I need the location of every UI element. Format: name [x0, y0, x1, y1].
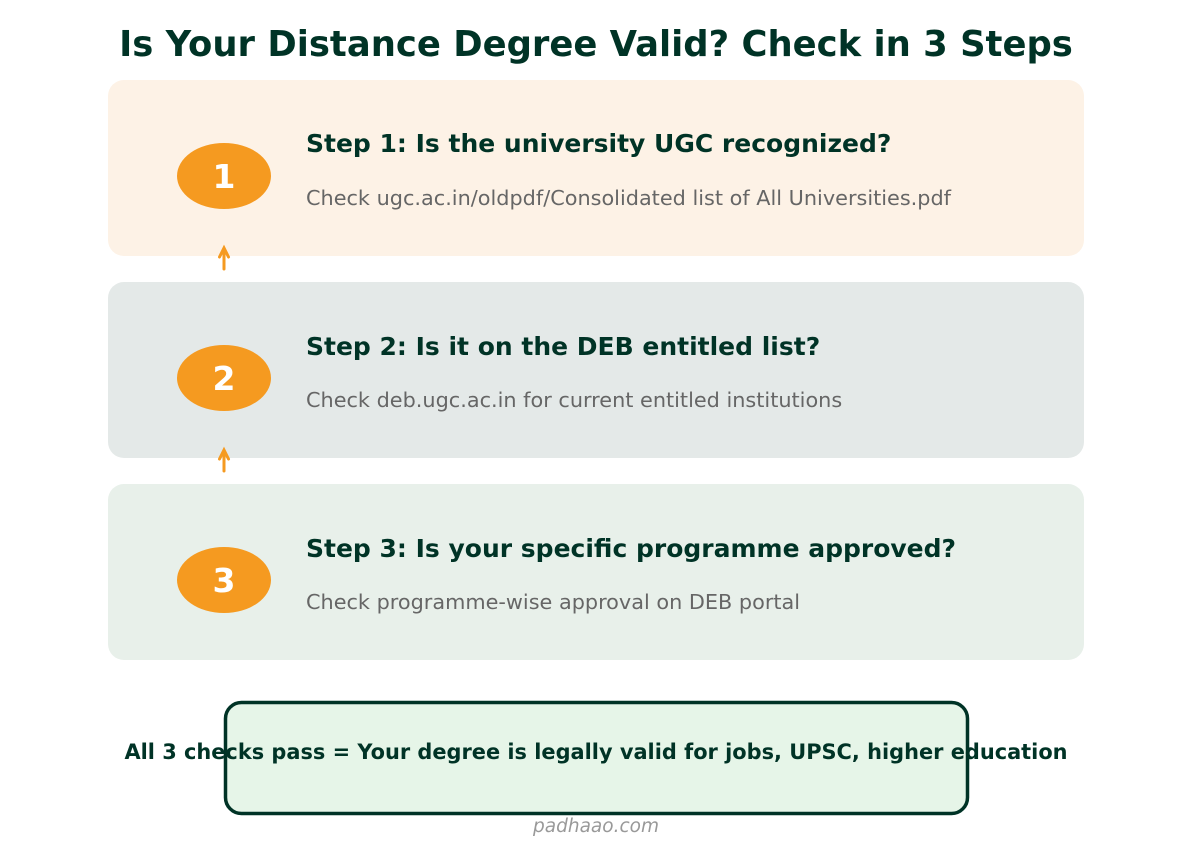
- heading: step 2: Step 2: Is it on the DEB entitled list?: [306, 332, 820, 361]
- icon: number 1: 1: [213, 157, 235, 196]
- footer: source: padhaao.com: [532, 816, 659, 837]
- icon: number 3: [177, 547, 271, 613]
- title: Is Your Distance Degree Valid? Check in 3 Steps: [119, 24, 1073, 65]
- text: step 3 detail: Check programme-wise approval on DEB portal: [306, 590, 800, 614]
- arrow: 2 to 1: [220, 248, 228, 269]
- arrow: 3 to 2: [220, 450, 228, 471]
- heading: step 1: Step 1: Is the university UGC recognized?: [306, 129, 891, 158]
- callout: result: [124, 702, 1068, 814]
- text: step 1 detail: Check ugc.ac.in/oldpdf/Consolidated list of All Universities.pdf: [306, 186, 952, 210]
- panel: step 3: [108, 484, 1084, 660]
- icon: number 3: 3: [213, 561, 235, 600]
- panel: step 2: [108, 282, 1084, 458]
- callout: result: All 3 checks pass = Your degree is legally valid for jobs, UPSC, higher education: [124, 740, 1068, 764]
- heading: step 3: Step 3: Is your specific programme approved?: [306, 534, 956, 563]
- text: step 2 detail: Check deb.ugc.ac.in for current entitled institutions: [306, 388, 842, 412]
- icon: number 1: [177, 143, 271, 209]
- panel: step 1: [108, 80, 1084, 256]
- icon: number 2: [177, 345, 271, 411]
- icon: number 2: 2: [213, 359, 235, 398]
